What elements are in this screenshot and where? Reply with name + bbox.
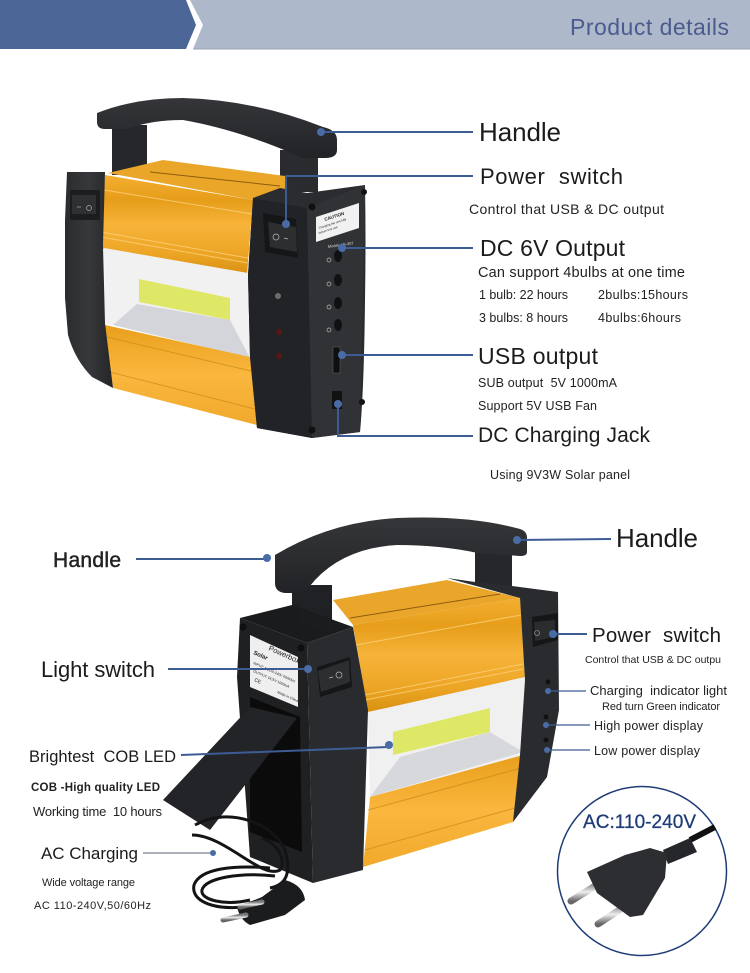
bulb glyphs <box>327 258 331 332</box>
plug <box>223 880 305 925</box>
right end cap <box>447 578 559 822</box>
gold lower front <box>105 325 257 425</box>
callout: USB output: USB output <box>478 343 599 369</box>
rating label: Made in China <box>277 690 299 703</box>
text: USB notes <box>478 376 618 413</box>
callout: Handle right <box>513 523 698 553</box>
rating label: OUTPUT: DC5V 1000mA <box>253 669 291 689</box>
callout: high power display: High power display <box>594 719 704 733</box>
handle <box>275 517 527 625</box>
COB lamp panel <box>104 248 250 358</box>
gold top face <box>108 160 285 200</box>
gold lower front <box>363 755 523 867</box>
back panel and bevel <box>163 605 368 883</box>
callout: Light switch <box>41 657 312 682</box>
text: bulb hours <box>479 288 688 325</box>
rating label <box>250 635 302 707</box>
battery cavity <box>250 697 302 852</box>
text: switch note: Control that USB & DC output <box>469 201 664 217</box>
text: bulb hours: 2bulbs:15hours <box>598 288 688 302</box>
rating label: Powerbox <box>267 644 302 665</box>
callout: Brightest COB LED <box>29 741 393 766</box>
rating label: INPUT: AC110-240V 50/60Hz <box>253 661 296 684</box>
gold upper front <box>100 175 253 275</box>
caution label: Model: LB-307 <box>327 240 355 249</box>
product photo: front-right view <box>65 98 367 438</box>
callout: charging indicator: Charging indicator light <box>590 683 727 698</box>
callout: Handle left: Handle <box>53 549 121 572</box>
callout: Handle: Handle <box>479 117 561 147</box>
text: bulb hours: 1 bulb: 22 hours <box>479 288 568 302</box>
icon: plug <box>571 827 715 924</box>
rocker switch <box>317 657 352 697</box>
callout: DC Charging Jack: DC Charging Jack <box>478 424 650 447</box>
text: working time: Working time 10 hours <box>33 804 162 819</box>
text: bulb hours: 4bulbs:6hours <box>598 311 681 325</box>
callout: Light switch: Light switch <box>41 657 155 682</box>
rating label: Solar <box>252 650 269 662</box>
open door <box>163 707 297 830</box>
text: solar panel note: Using 9V3W Solar panel <box>490 468 630 482</box>
USB port <box>333 347 340 373</box>
indicator lights <box>275 293 282 359</box>
callout: AC Charging <box>41 844 216 863</box>
callout: low power display <box>544 744 701 758</box>
callout: Brightest COB LED: Brightest COB LED <box>29 748 176 766</box>
gold upper front <box>353 598 525 712</box>
callout: Power switch: Power switch <box>480 164 623 189</box>
text: COB quality: COB -High quality LED <box>31 782 160 794</box>
callout: AC Charging: AC Charging <box>41 844 138 863</box>
DC jack <box>332 391 342 409</box>
rating label: CE <box>253 677 263 686</box>
callout: Handle <box>317 117 561 147</box>
caution label: before first use <box>318 225 338 235</box>
callout: Handle right: Handle <box>616 523 698 553</box>
callout: high power display <box>543 719 704 733</box>
text: USB notes: Support 5V USB Fan <box>478 399 597 413</box>
header banner <box>0 0 750 50</box>
inset heading: AC:110-240V <box>583 812 696 833</box>
text: bulb support: Can support 4bulbs at one time <box>478 265 685 281</box>
callout: low power display: Low power display <box>594 744 701 758</box>
callout: USB output <box>338 343 599 369</box>
text: USB notes: SUB output 5V 1000mA <box>478 376 618 390</box>
gold top face <box>333 580 520 625</box>
caution label: Charging the unit fully <box>318 217 347 230</box>
product photo: back-left view <box>163 517 559 925</box>
callout: Power switch <box>282 164 623 228</box>
inset: plug circle <box>558 786 726 956</box>
caution label <box>316 203 359 249</box>
text: voltage range: Wide voltage range <box>42 877 135 889</box>
callout: Power switch right: Power switch <box>592 624 721 647</box>
text: indicator note: Red turn Green indicator <box>602 701 720 713</box>
output sockets <box>334 250 342 331</box>
callout: DC 6V Output <box>338 235 626 261</box>
callout: DC 6V Output: DC 6V Output <box>480 235 626 261</box>
callout: DC Charging Jack <box>334 400 650 447</box>
heading: Product details: Product details <box>570 14 729 40</box>
COB lamp panel <box>368 677 525 797</box>
text: AC voltage: AC 110-240V,50/60Hz <box>34 900 151 912</box>
text: bulb hours: 3 bulbs: 8 hours <box>479 311 568 325</box>
screws <box>240 624 246 630</box>
power cord <box>192 817 288 908</box>
right end panel <box>248 185 367 438</box>
screws <box>308 189 367 434</box>
caution label: CAUTION <box>324 211 345 222</box>
left end cap <box>65 172 113 388</box>
callout: Handle left <box>53 549 271 572</box>
rocker switch <box>263 213 298 258</box>
text: switch note: Control that USB & DC outpu <box>585 654 721 666</box>
handle <box>97 98 337 192</box>
